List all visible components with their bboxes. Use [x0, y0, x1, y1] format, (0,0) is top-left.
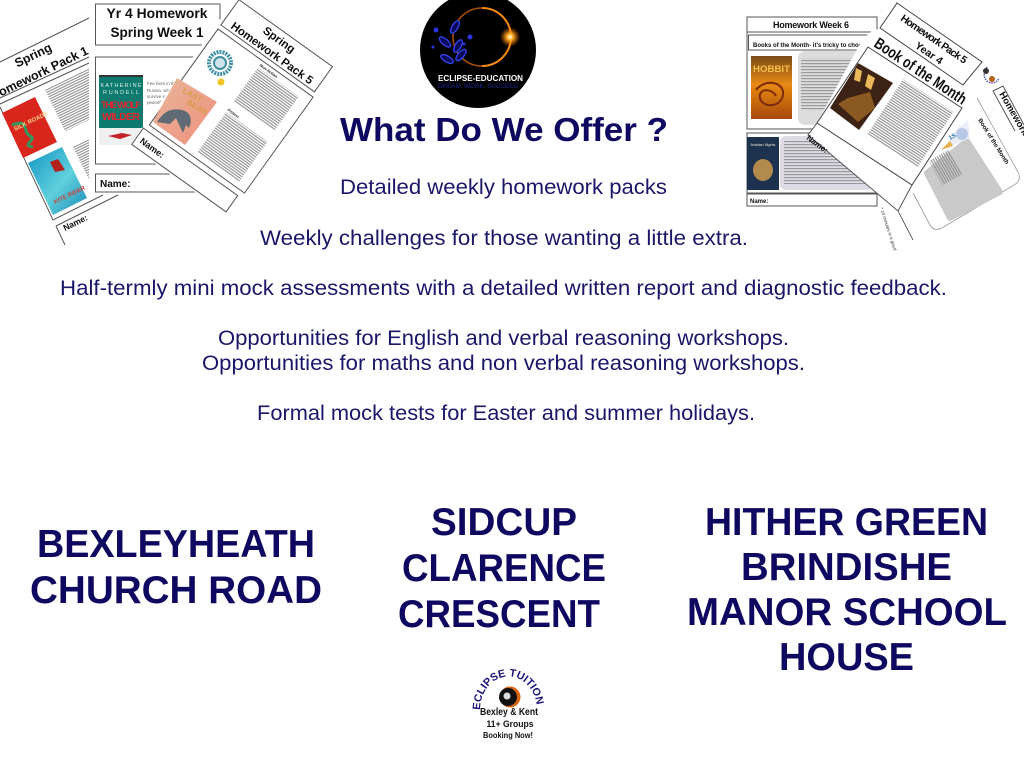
logo: Eclipse Tuition: ECLIPSE TUITION [472, 668, 544, 710]
text block: list of offers: Detailed weekly homework packs [340, 175, 667, 199]
sheet: Homework Week 6: Arabian Nights [751, 143, 776, 147]
logo: Eclipse-Education: ECLIPSE-EDUCATION [438, 73, 523, 83]
sheet: Spring Homework Pack 1: KITE RIDER [53, 185, 87, 206]
sheet: Book of the Month (rotated back page): Book of the Month [976, 118, 1009, 166]
location: Hither Green Brindishe Manor School House: BRINDISHE [741, 546, 952, 589]
text block: list of offers: Opportunities for English and verbal reasoning workshops. [218, 326, 789, 350]
location: Hither Green Brindishe Manor School House: MANOR SCHOOL [687, 591, 1007, 634]
sheet: Spring Homework Pack 5 [130, 0, 334, 216]
location: Bexleyheath Church Road: CHURCH ROAD [30, 569, 322, 612]
text block: list of offers: Opportunities for maths and non verbal reasoning workshops. [202, 351, 805, 375]
location: Hither Green Brindishe Manor School House: HOUSE [779, 636, 914, 679]
sheet: Book of the Month (rotated back page) [879, 67, 1024, 251]
sheet: Spring Homework Pack 5: Non-fiction [259, 63, 279, 79]
sheet: Yr 4 Homework Spring Week 1: Yr 4 Homework [106, 5, 208, 21]
sheet: Yr 4 Homework Spring Week 1: Russia, whe [147, 88, 172, 93]
sheet: Yr 4 Homework Spring Week 1: survive in [147, 94, 167, 99]
location: Hither Green Brindishe Manor School House: HITHER GREEN [705, 501, 988, 544]
text block: list of offers [60, 175, 947, 425]
logo: Eclipse Tuition: Bexley & Kent [480, 707, 539, 718]
homework sheets collage: left [0, 0, 334, 245]
sheet: Yr 4 Homework Spring Week 1: THE WOLF [101, 100, 141, 111]
sheet: Spring Homework Pack 1: Spring [12, 40, 54, 70]
sheet: Homework Week 6: HOBBIT [753, 64, 790, 75]
sheet: Homework Pack 5 Year 4, Book of the Month [805, 3, 982, 211]
logo: Eclipse Tuition: Booking Now! [483, 730, 533, 740]
location: Bexleyheath Church Road: BEXLEYHEATH [37, 523, 315, 566]
sheet: Homework Week 6: Name: [750, 199, 768, 205]
sheet: Spring Homework Pack 5: Name: [138, 136, 166, 160]
sheet: Yr 4 Homework Spring Week 1: Spring Week 1 [110, 24, 204, 40]
sheet: Homework Pack 5 Year 4, Book of the Month: Year 4 [913, 40, 945, 67]
sheet: Spring Homework Pack 5: Spring [260, 25, 297, 56]
logo: Eclipse-Education [420, 0, 536, 108]
text block: list of offers: Formal mock tests for Easter and summer holidays. [257, 401, 755, 425]
text block: list of offers: Weekly challenges for those wanting a little extra. [260, 226, 748, 250]
logo: Eclipse-Education: DREAM. WORK. SUCCEED [438, 83, 518, 90]
location: Sidcup Clarence Crescent: CRESCENT [398, 593, 600, 636]
sheet: Homework Pack 5 Year 4, Book of the Month: Homework Pack 5 [898, 12, 969, 67]
sheet: Spring Homework Pack 5: LAST [181, 86, 204, 104]
location: Hither Green Brindishe Manor School House [687, 501, 1007, 679]
sheet: Yr 4 Homework Spring Week 1: WILDER [102, 111, 140, 123]
sheet: Yr 4 Homework Spring Week 1: peacefl [147, 100, 162, 105]
sheet: Book of the Month (rotated back page): * 10 minutes in a good [879, 207, 898, 251]
title: What Do We Offer ? [340, 111, 668, 148]
sheet: Homework Week 6: Books of the Month- it's tricky to choose [753, 42, 869, 49]
sheet: Yr 4 Homework Spring Week 1 [89, 0, 225, 194]
sheet: Yr 4 Homework Spring Week 1: RUNDELL [103, 90, 139, 96]
sheet: Homework Pack 5 Year 4, Book of the Month: Book of the Month [871, 35, 969, 108]
sheet: Homework Week 6 [747, 17, 878, 206]
sheet: Spring Homework Pack 5: Homework Pack 5 [228, 20, 315, 88]
text block: list of offers: Half-termly mini mock assessments with a detailed written report and diagnostic feedback. [60, 276, 947, 300]
logo: Eclipse Tuition [472, 668, 544, 740]
sheet: Spring Homework Pack 1: Name: [61, 212, 89, 233]
sheet: Spring Homework Pack 5: BEAR [185, 98, 209, 117]
homework sheets collage: right [747, 3, 1024, 251]
sheet: Spring Homework Pack 1 [0, 18, 121, 245]
sheet: Spring Homework Pack 5: Fiction [227, 107, 241, 119]
sheet: Yr 4 Homework Spring Week 1: KATHERINE [100, 83, 142, 89]
sheet: Homework Week 6: Homework Week 6 [773, 20, 849, 30]
sheet: Yr 4 Homework Spring Week 1: Fee lives in th [147, 81, 175, 86]
logo: Eclipse Tuition: 11+ Groups [486, 719, 534, 730]
location: Sidcup Clarence Crescent: CLARENCE [402, 547, 606, 590]
location: Sidcup Clarence Crescent: SIDCUP [431, 501, 577, 544]
sheet: Homework Pack 5 Year 4, Book of the Month: Name: [805, 133, 830, 155]
location: Bexleyheath Church Road [30, 523, 322, 612]
sheet: Yr 4 Homework Spring Week 1: Name: [100, 179, 131, 190]
sheet: Spring Homework Pack 1: SILK ROADS [13, 111, 49, 133]
location: Sidcup Clarence Crescent [398, 501, 606, 636]
sheet: Book of the Month (rotated back page): 1S [948, 133, 957, 142]
